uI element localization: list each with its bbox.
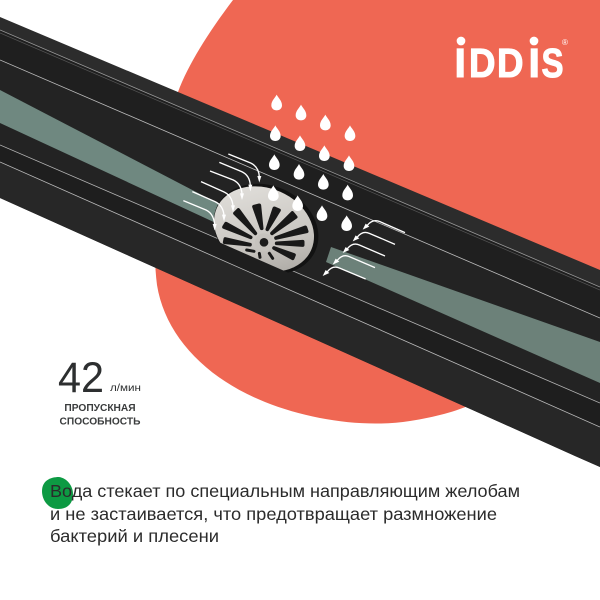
water drops (268, 95, 355, 231)
water stream right (326, 247, 600, 383)
left flow arrows (183, 154, 261, 231)
flow rate caption: ПРОПУСКНАЯ (64, 403, 136, 414)
flow rate value: 42 (58, 354, 104, 402)
logo IDDIS: I (528, 40, 540, 86)
description text: и не застаивается, что предотвращает размножение (50, 504, 497, 524)
logo IDDIS (454, 37, 568, 86)
right flow arrows (323, 221, 405, 279)
flow rate value: л/мин (110, 382, 141, 394)
logo IDDIS: I (454, 40, 466, 86)
flow rate caption (60, 403, 140, 428)
flow rate caption: СПОСОБНОСТЬ (60, 416, 140, 428)
flow rate value (58, 354, 141, 402)
description text: Вода стекает по специальным направляющим желобам (50, 481, 520, 501)
logo IDDIS: D (469, 40, 496, 86)
red blob (155, 0, 600, 424)
drain channel body (0, 17, 600, 467)
round drain grate (214, 184, 318, 272)
logo IDDIS: S (542, 40, 564, 86)
logo IDDIS: D (497, 40, 524, 86)
description text: бактерий и плесени (50, 526, 219, 546)
water stream left (0, 90, 225, 224)
logo IDDIS: ® (562, 38, 568, 47)
description text (50, 481, 520, 546)
green marker blob (42, 477, 73, 509)
